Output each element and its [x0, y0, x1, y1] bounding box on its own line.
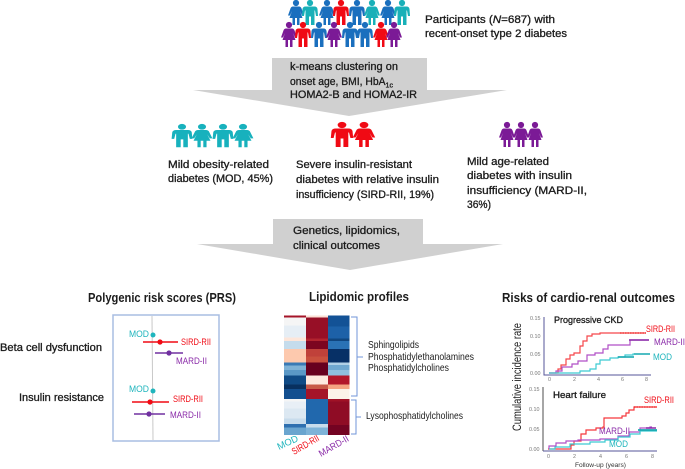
chart: progressive CKD: 0 — [548, 377, 551, 383]
chart: progressive CKD — [530, 315, 685, 383]
heading: cardio-renal outcomes: Risks of cardio-renal outcomes — [502, 291, 675, 305]
chart: progressive CKD: MOD — [653, 352, 672, 363]
arrow: clustering: 1c — [386, 80, 393, 90]
chart: heart failure — [529, 387, 674, 460]
label: insulin resistance: Insulin resistance — [19, 392, 104, 404]
chart: heart failure: MOD — [609, 439, 628, 450]
icon: SIRD-RII group — [331, 122, 375, 147]
chart: PRS forest plot: MOD — [129, 329, 149, 340]
chart: heart failure: 0.00 — [529, 447, 540, 453]
bracket: lysophosphatidylcholines — [351, 400, 361, 434]
bracket: upper lipid classes — [351, 317, 363, 396]
MARD-II description: diabetes with insulin — [467, 170, 572, 182]
lipid class labels: Phosphatidylethanolamines — [368, 351, 474, 363]
chart: heart failure: MARD-II — [599, 426, 630, 437]
participants text — [425, 14, 568, 40]
chart: progressive CKD: SIRD-RII — [646, 324, 675, 335]
MARD-II description: 36%) — [467, 199, 491, 211]
arrow: clustering: HOMA2-B and HOMA2-IR — [290, 89, 417, 101]
arrow: clustering: k-means clustering on — [290, 61, 398, 73]
MARD-II description: Mild age-related — [467, 156, 549, 168]
participants text: Participants ( N=687) with — [425, 14, 555, 26]
x axis title: Follow-up (years) — [575, 462, 626, 469]
SIRD-RII description — [296, 159, 439, 201]
SIRD-RII description: insufficiency (SIRD-RII, 19%) — [296, 189, 434, 201]
chart: heart failure: SIRD-RII — [644, 395, 674, 406]
participants text: recent-onset type 2 diabetes — [425, 28, 568, 40]
arrow: analyses — [197, 219, 503, 270]
chart: heart failure: 6 — [625, 454, 628, 460]
lipid class labels: Sphingolipids — [368, 339, 419, 351]
heatmap column labels — [276, 433, 351, 460]
chart: heart failure: 0 — [547, 454, 550, 460]
chart: PRS forest plot: MARD-II — [176, 356, 207, 367]
chart: PRS forest plot: MOD — [129, 384, 149, 395]
chart: progressive CKD: 0.15 — [530, 316, 540, 322]
chart: heart failure: 0.05 — [529, 427, 540, 433]
lysophosphatidylcholines label: Lysophosphatidylcholines — [366, 410, 463, 422]
chart: PRS forest plot: SIRD-RII — [173, 394, 203, 405]
chart: PRS forest plot — [113, 315, 219, 441]
chart: progressive CKD: 6 — [621, 377, 624, 383]
SIRD-RII description: Severe insulin-resistant — [296, 159, 412, 171]
y axis title: Cumulative incidence rate — [512, 323, 524, 431]
heatmap column labels: MOD — [276, 433, 300, 453]
chart: heart failure: 0.15 — [529, 387, 540, 393]
label: beta cell dysfunction: Beta cell dysfunction — [0, 342, 102, 354]
arrow: analyses: Genetics, lipidomics, — [293, 225, 400, 237]
heading: lipidomic profiles: Lipidomic profiles — [309, 290, 409, 304]
lipid class labels: Phosphatidylcholines — [368, 362, 449, 374]
icon: MOD group — [172, 124, 253, 147]
chart: heart failure: 2 — [573, 454, 576, 460]
MOD description: diabetes (MOD, 45%) — [168, 173, 273, 185]
arrow: analyses: clinical outcomes — [293, 240, 381, 252]
heading: PRS: Polygenic risk scores (PRS) — [88, 291, 236, 305]
chart: heart failure: Heart failure — [553, 390, 606, 401]
chart: progressive CKD: 8 — [645, 377, 648, 383]
chart: progressive CKD: 0.00 — [530, 371, 540, 377]
chart: heart failure: 4 — [599, 454, 602, 460]
chart: PRS forest plot: SIRD-RII — [181, 337, 211, 348]
arrow: clustering: onset age, BMI, HbA — [290, 76, 392, 88]
icon: participants crowd — [281, 0, 410, 47]
heatmap column labels: SIRD-RII — [290, 433, 321, 458]
heatmap column labels: MARD-II — [317, 434, 351, 460]
chart: progressive CKD: 2 — [573, 377, 576, 383]
chart: progressive CKD: 0.05 — [530, 352, 540, 358]
MOD description — [168, 159, 273, 185]
chart: heart failure: 8 — [651, 454, 654, 460]
chart: lipid heatmap — [284, 316, 350, 435]
MARD-II description — [467, 156, 587, 211]
chart: progressive CKD: 0.10 — [530, 334, 540, 340]
chart: PRS forest plot: MARD-II — [170, 410, 201, 421]
MOD description: Mild obesity-related — [168, 159, 269, 171]
arrow: clustering — [193, 58, 507, 116]
chart: heart failure: 0.10 — [529, 407, 540, 413]
lipid class labels — [368, 339, 474, 374]
SIRD-RII description: diabetes with relative insulin — [296, 174, 439, 186]
chart: progressive CKD: 4 — [597, 377, 600, 383]
icon: MARD-II group — [499, 122, 543, 147]
chart: progressive CKD: Progressive CKD — [554, 315, 623, 326]
MARD-II description: insufficiency (MARD-II, — [467, 185, 587, 197]
